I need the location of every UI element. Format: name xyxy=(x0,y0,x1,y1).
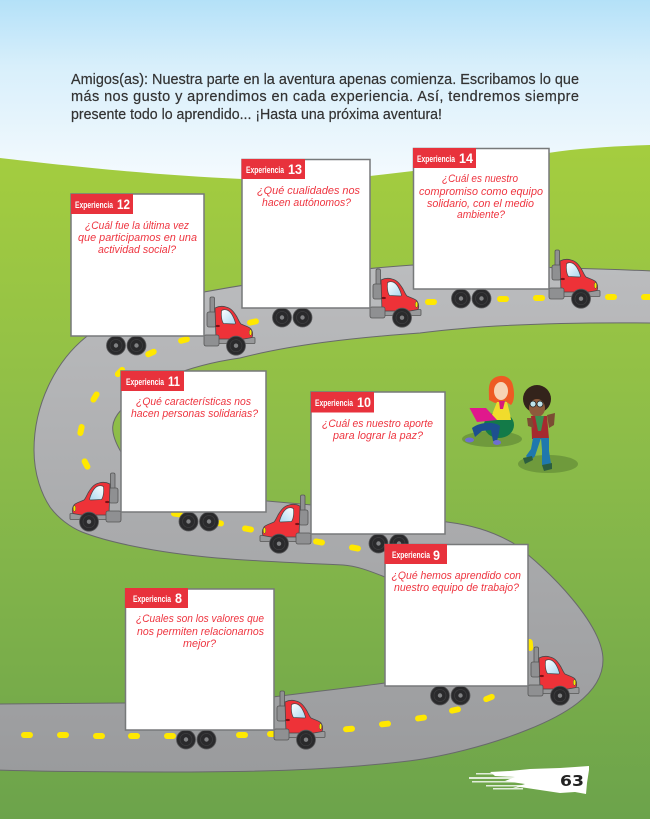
badge xyxy=(311,392,374,412)
question: ¿Qué cualidades nos xyxy=(257,185,360,197)
question: mejor? xyxy=(183,638,217,650)
card xyxy=(71,194,204,336)
question: solidario, con el medio xyxy=(427,198,534,210)
question: ¿Qué hemos aprendido con xyxy=(392,570,521,582)
badge: Experiencia xyxy=(315,398,354,408)
badge: Experiencia xyxy=(75,200,114,210)
badge xyxy=(242,159,305,179)
badge: 13 xyxy=(288,161,302,177)
question: para lograr la paz? xyxy=(332,430,424,442)
question: compromiso como equipo xyxy=(419,186,543,198)
badge xyxy=(121,371,184,391)
question: hacen autónomos? xyxy=(262,197,352,209)
page number brush xyxy=(469,766,589,794)
panel: experiencia 13 xyxy=(242,159,421,327)
truck xyxy=(70,473,218,531)
question: ¿Cuál es nuestro xyxy=(442,173,518,185)
question: nuestro equipo de trabajo? xyxy=(394,582,520,594)
question xyxy=(131,396,259,420)
question: hacen personas solidarias? xyxy=(131,408,259,420)
intro text xyxy=(71,72,579,123)
card xyxy=(385,544,528,686)
question xyxy=(419,173,543,221)
question xyxy=(392,570,521,594)
question: ambiente? xyxy=(457,209,506,221)
road centre dashes xyxy=(21,294,650,739)
truck xyxy=(430,647,579,705)
question xyxy=(136,613,264,650)
page number: 63 xyxy=(560,772,584,790)
panel: experiencia 12 xyxy=(71,194,255,355)
badge xyxy=(125,588,188,608)
question: ¿Cuál fue la última vez xyxy=(85,220,189,232)
badge: 9 xyxy=(433,547,440,563)
winding road xyxy=(0,265,650,772)
badge: 14 xyxy=(459,150,473,166)
badge: 12 xyxy=(117,196,130,212)
question: nos permiten relacionarnos xyxy=(137,626,264,638)
panel: experiencia 8 xyxy=(125,588,325,749)
badge: Experiencia xyxy=(126,377,165,387)
badge: Experiencia xyxy=(417,154,456,164)
card xyxy=(414,148,549,289)
question: actividad social? xyxy=(98,244,177,256)
intro text: más nos gusto y aprendimos en cada experiencia. Así, tendremos siempre xyxy=(71,89,579,105)
badge xyxy=(413,148,476,168)
panel: experiencia 14 xyxy=(413,148,600,308)
truck xyxy=(106,297,255,355)
badge: 10 xyxy=(357,394,371,410)
question: ¿Cuál es nuestro aporte xyxy=(322,418,433,430)
badge: 11 xyxy=(168,373,180,389)
question: ¿Cuales son los valores que xyxy=(136,613,264,625)
question xyxy=(322,418,433,442)
question xyxy=(78,220,197,256)
truck xyxy=(272,269,421,327)
card xyxy=(126,589,274,730)
card xyxy=(121,371,266,512)
illustration: boy xyxy=(518,385,578,473)
question: ¿Qué características nos xyxy=(136,396,251,408)
panel: experiencia 9 xyxy=(384,544,579,705)
badge: Experiencia xyxy=(133,594,172,604)
badge: Experiencia xyxy=(392,550,431,560)
question xyxy=(257,185,360,209)
sky background xyxy=(0,0,650,190)
badge: 8 xyxy=(175,590,182,606)
truck xyxy=(260,495,408,553)
panel: experiencia 10 xyxy=(260,392,445,553)
illustration: girl with laptop xyxy=(462,376,522,447)
question: que participamos en una xyxy=(78,232,197,244)
panel: experiencia 11 xyxy=(70,371,266,531)
badge xyxy=(71,194,133,214)
badge xyxy=(384,544,447,564)
card xyxy=(311,392,445,534)
intro text: Amigos(as): Nuestra parte en la aventura apenas comienza. Escribamos lo que xyxy=(71,72,579,88)
badge: Experiencia xyxy=(246,165,285,175)
intro text: presente todo lo aprendido... ¡Hasta una próxima aventura! xyxy=(71,107,442,123)
truck xyxy=(176,691,325,749)
truck xyxy=(452,250,600,308)
card xyxy=(242,160,370,308)
